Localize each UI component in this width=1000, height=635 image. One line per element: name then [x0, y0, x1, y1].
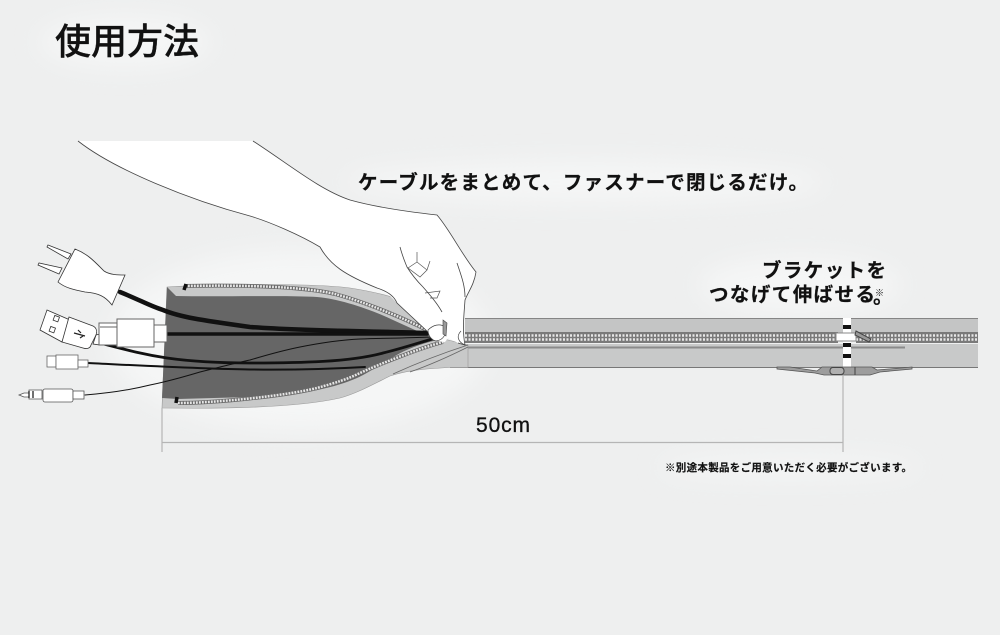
caption: bracket extension — [709, 259, 893, 308]
caption: bracket extension: つなげて伸ばせる — [709, 284, 875, 306]
bracket joining two zippers — [777, 318, 912, 375]
dimension line: 50cm: 50cm — [476, 414, 530, 437]
icon: lightning connector — [47, 355, 88, 369]
pouch: opened zipper with cables — [162, 284, 468, 408]
icon: audio jack — [19, 389, 84, 402]
caption: bracket extension: ※ — [875, 288, 884, 298]
caption: close with zipper: ケーブルをまとめて、ファスナーで閉じるだけ。 — [358, 171, 808, 194]
dimension line: 50cm — [162, 375, 843, 452]
icon: power plug — [38, 245, 125, 305]
cables — [85, 292, 432, 395]
caption: bracket extension: 。 — [873, 286, 893, 308]
title: 使用方法 — [55, 21, 199, 62]
caption: bracket extension: ブラケットを — [762, 259, 886, 282]
hand pulling the zipper — [78, 141, 476, 345]
icon: USB-A connector — [40, 310, 100, 349]
icon: large USB connector — [99, 319, 167, 347]
zipper band: right section — [440, 318, 978, 368]
footnote: ※別途本製品をご用意いただく必要がございます。 — [665, 461, 912, 474]
